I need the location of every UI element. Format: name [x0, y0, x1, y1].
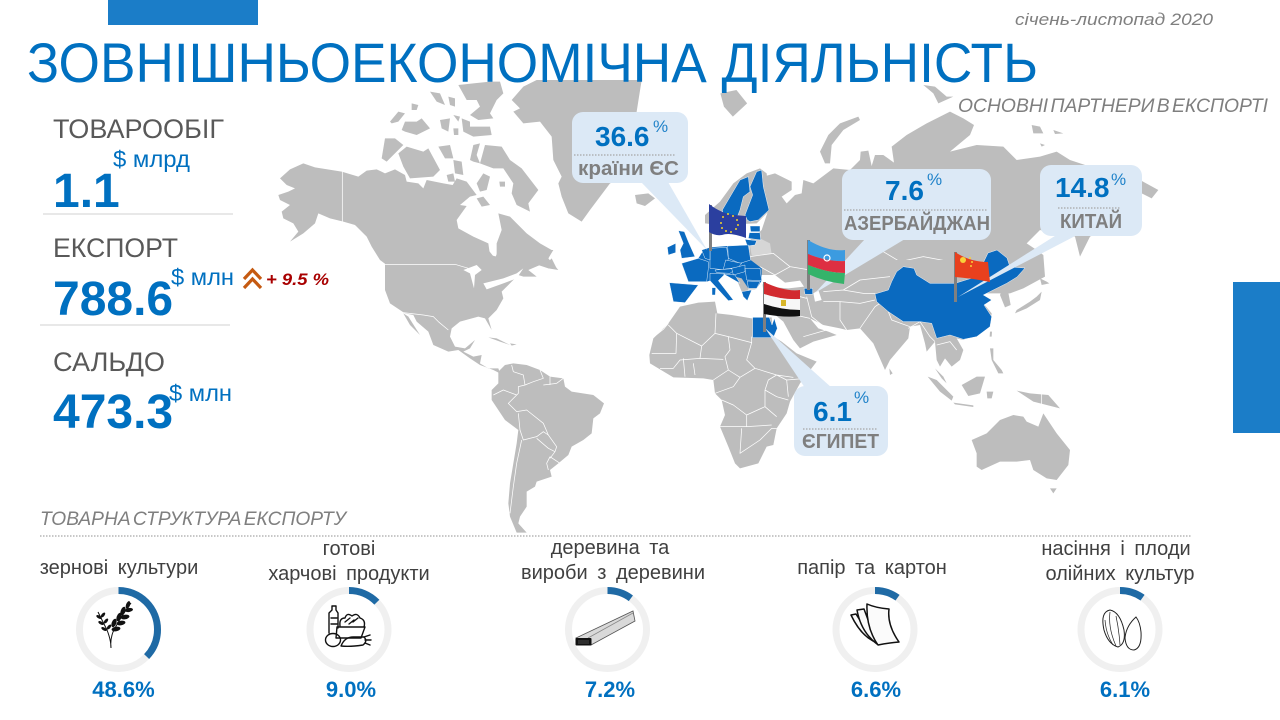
map: Middle East, South and East Asia, Oceania: [760, 260, 1070, 493]
value: 48.6%: [92, 677, 155, 702]
right accent bar: [1233, 282, 1280, 433]
donut: 9.0%: [310, 590, 388, 668]
category: oilseeds: насіння і плоди: [1041, 538, 1191, 560]
flag: EU: [709, 204, 746, 251]
stat: turnover: [43, 114, 233, 218]
callout: China: %: [1111, 170, 1126, 189]
callout: Egypt: %: [854, 388, 869, 407]
callout: Azerbaijan: %: [927, 170, 942, 189]
flag: China: [954, 252, 990, 302]
callout: Egypt: ЄГИПЕТ: [802, 431, 879, 453]
callout: EU: [572, 112, 707, 250]
category: food: готові: [323, 538, 375, 560]
map: Africa: [649, 302, 817, 468]
map: USA, Mexico, Central and South America: [385, 250, 604, 533]
category: oilseeds: [1041, 538, 1195, 702]
callout: China: 14.8: [1055, 172, 1110, 203]
category: grain: зернові культури: [40, 557, 198, 579]
category: wood: вироби з деревини: [521, 562, 705, 584]
section heading: export structure: ТОВАРНА СТРУКТУРА ЕКСПОРТУ: [40, 509, 348, 530]
flag: Azerbaijan: [807, 240, 845, 290]
category: grain: [40, 557, 198, 702]
stat: balance: [53, 347, 232, 439]
stat: export: ЕКСПОРТ: [53, 233, 178, 263]
section heading: partners: ОСНОВНІ ПАРТНЕРИ В ЕКСПОРТІ: [958, 96, 1269, 117]
icon: wooden beam: [576, 611, 635, 646]
callout: EU: країни ЄС: [578, 158, 679, 180]
icon: double chevron up: [244, 270, 261, 288]
growth value: + 9.5 %: [266, 270, 329, 289]
category: paper: [797, 557, 947, 702]
map: Svalbard: [720, 90, 747, 117]
callout: EU: %: [653, 117, 668, 136]
stat: export: [40, 233, 329, 326]
donut: 7.2%: [568, 590, 646, 668]
map: China highlight: [875, 250, 1025, 339]
value: 9.0%: [326, 677, 376, 702]
stat: balance: $ млн: [169, 380, 232, 406]
map: Greenland and Iceland: [512, 80, 655, 222]
icon: seeds: [1103, 610, 1141, 650]
category: wood: деревина та: [551, 537, 670, 559]
title: ЗОВНІШНЬОЕКОНОМІЧНА ДІЯЛЬНІСТЬ: [27, 31, 1038, 94]
category: paper: папір та картон: [797, 557, 947, 579]
donut: 48.6%: [80, 590, 158, 668]
value: 6.1%: [1100, 677, 1150, 702]
top accent bar: [108, 0, 258, 25]
map: Russia and northern Asia: [750, 85, 1158, 293]
stat: export: $ млн: [171, 264, 234, 290]
value: 7.2%: [585, 677, 635, 702]
stat: balance: 473.3: [53, 386, 173, 439]
stat: export: 788.6: [53, 273, 173, 326]
callout: Egypt: [765, 328, 888, 456]
stat: turnover: 1.1: [53, 165, 120, 218]
callout: China: [958, 165, 1142, 297]
donut: 6.6%: [836, 590, 914, 668]
stat: balance: САЛЬДО: [53, 347, 165, 377]
period label: січень-листопад 2020: [1015, 10, 1214, 29]
callout: Egypt: 6.1: [813, 396, 852, 427]
icon: paper sheets: [851, 604, 899, 645]
category: food: харчові продукти: [268, 563, 430, 585]
value: 6.6%: [851, 677, 901, 702]
stat: turnover: ТОВАРООБІГ: [53, 114, 224, 144]
world map: [278, 80, 1158, 533]
category: oilseeds: олійних культур: [1045, 563, 1195, 585]
map: Canada, Alaska, Arctic islands: [278, 82, 558, 280]
flag: Egypt: [763, 282, 800, 332]
donut: 6.1%: [1081, 590, 1159, 668]
map: eastern Europe and seas: [705, 168, 840, 308]
stat: turnover: $ млрд: [113, 146, 191, 172]
callout: Azerbaijan: 7.6: [885, 175, 924, 206]
callout: Azerbaijan: [815, 169, 991, 293]
icon: food basket: [326, 606, 371, 646]
map: EU countries: [667, 170, 813, 303]
category: food: [268, 538, 430, 702]
callout: China: КИТАЙ: [1060, 209, 1122, 233]
callout: EU: 36.6: [595, 121, 650, 152]
callout: Azerbaijan: АЗЕРБАЙДЖАН: [844, 211, 990, 235]
icon: wheat: [96, 601, 133, 648]
category: wood: [521, 537, 705, 702]
map: Egypt highlight: [753, 317, 777, 338]
